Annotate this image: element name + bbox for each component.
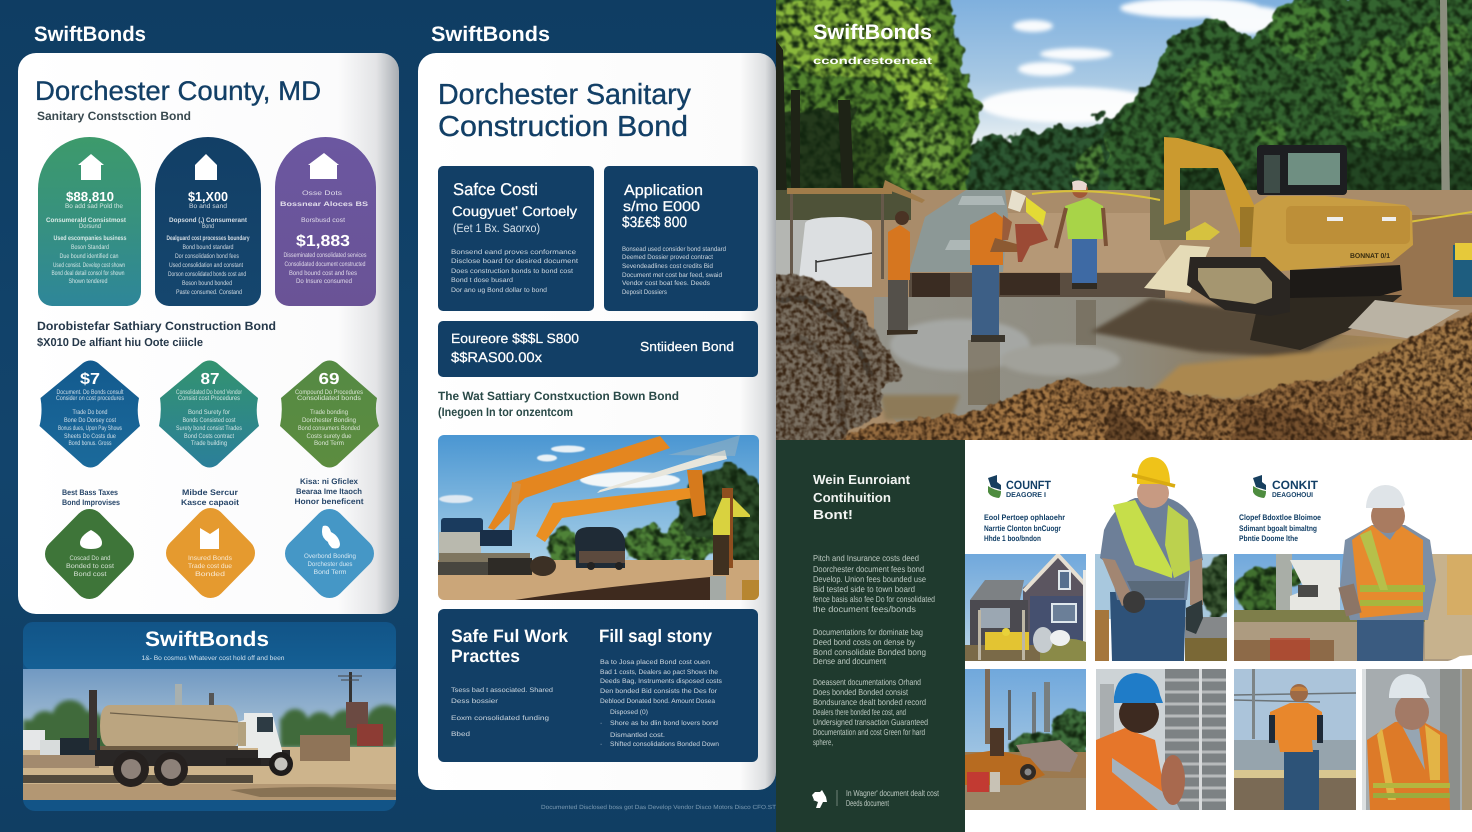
gallery text right: Sdimant bgoalt bimaltng	[1239, 524, 1317, 533]
card: green arch: Shown tendered	[68, 278, 108, 285]
logo: SwiftBonds photo: SwiftBonds	[813, 21, 932, 44]
sidebar paragraph one	[813, 553, 935, 614]
diamond: blue	[40, 360, 140, 468]
diamond: teal: 87	[200, 371, 220, 388]
water pool	[874, 297, 1410, 425]
label: right rounded diamond: Kisa: ni Gficlex	[300, 477, 359, 486]
sidebar paragraph three: Bondsurance dealt bonded record	[813, 697, 926, 707]
card: safe work practices: Fill sagl stony	[599, 626, 712, 646]
rounded diamond: green: Bond cost	[74, 571, 107, 578]
worker: green vest	[1056, 180, 1106, 289]
title: Dorchester Sanitary Construction Bond: Dorchester Sanitary	[438, 79, 691, 111]
card: safe cost: Does construction bonds to bond cost	[451, 268, 573, 275]
sidebar paragraph two: Documentations for dominate bag	[813, 627, 923, 637]
card: safe work practices: Bad 1 costs, Dealers ao pact Shows the	[600, 669, 718, 676]
photo: tanker truck	[23, 669, 405, 800]
card: application: Sevendeadlines cost credits Bid	[622, 263, 713, 270]
title: Dorchester Sanitary Construction Bond	[438, 79, 691, 143]
white wave strip	[1350, 655, 1472, 668]
icon: house	[195, 154, 217, 180]
sidebar paragraph one: Doorchester document fees bond	[813, 564, 924, 574]
rounded diamond: orange: Bonded	[195, 571, 225, 578]
card: safe cost: Bond t dose busard	[451, 277, 513, 284]
card: safe work practices: Practtes	[451, 646, 520, 666]
card: navy arch: Boson bound bonded	[182, 280, 232, 287]
card: purple arch: Borsbusd cost	[301, 217, 345, 224]
card: green arch: Bond deal detail consol for shown	[52, 270, 125, 277]
diamond: teal: Bonds Consisted cost	[182, 417, 236, 424]
sidebar paragraph one: fence basis also fee Do for consolidated	[813, 594, 935, 604]
card: safe cost: Cougyuet' Cortoely	[452, 203, 577, 219]
rounded diamond: green: Bonded to cost	[66, 563, 114, 570]
diamond: green: Compound Do Procedures	[295, 389, 364, 396]
panel: green sidebar	[776, 440, 965, 832]
card: navy arch: Dor consolidation bond fees	[175, 253, 240, 260]
card: application: $3£€$ 800	[622, 214, 687, 231]
worker: yellow hard hat	[1100, 457, 1203, 661]
rounded diamond: green	[60, 524, 119, 584]
photo: worker with white hat	[1362, 669, 1472, 810]
diamond: blue: Bonus dues, Upon Pay Shows	[58, 425, 123, 432]
bar: course cost: Sntiideen Bond	[640, 339, 734, 354]
panel: truck photo card	[23, 622, 405, 811]
card: application: Document met cost bar feed, swaid	[622, 272, 722, 279]
card: safe cost: Disclose board for desired document	[451, 258, 578, 265]
card: application: Vendor cost boat fees. Deeds	[622, 280, 711, 287]
card: navy arch: Bond	[202, 223, 214, 230]
diamond: green: Bond consumers Bonded	[298, 425, 360, 432]
section heading: construction bond: Dorobistefar Sathiary Construction Bond	[37, 319, 276, 333]
sidebar footer text: In Wagner' document dealt cost	[846, 788, 939, 798]
logo: Counft	[988, 475, 1052, 499]
card: safe work practices: Tsess bad t associated. Shared	[451, 687, 553, 694]
card: purple arch: Bossnear Aloces BS	[280, 201, 369, 208]
subheading: sanitary construction	[438, 389, 679, 419]
card: safe work practices: Bbed	[451, 731, 470, 738]
diamond: blue: Trade Do bond	[72, 409, 108, 416]
card: navy arch: Bond bound standard	[182, 244, 234, 251]
photo: excavator booms	[438, 435, 769, 600]
tank	[776, 217, 872, 287]
card: safe cost: Dor ano ug Bond dollar to bond	[451, 287, 547, 294]
sidebar paragraph three: Dealers there bonded fee cost, and	[813, 707, 906, 717]
logo: Conkit: CONKIT	[1272, 478, 1319, 492]
label: right rounded diamond: Bearaa Ime Itaoch	[296, 487, 362, 496]
diamond: teal: Consolidated Do bond Vendor	[176, 389, 243, 396]
card subtitle: 1&- Bo cosmos Whatever cost hold off and been	[142, 655, 285, 662]
barrel	[1453, 243, 1472, 297]
gallery text left	[984, 513, 1065, 543]
label: left rounded diamond: Best Bass Taxes	[62, 488, 118, 497]
card: application	[604, 166, 758, 311]
diamond: green: Bond Term	[314, 440, 344, 447]
label: right rounded diamond: Honor beneficent	[294, 497, 364, 506]
sidebar paragraph one: Bid tested side to town board	[813, 584, 915, 594]
sidebar paragraph three: Undersigned transaction Guaranteed	[813, 717, 928, 727]
card: green arch: Bo add sad Pold the	[65, 203, 123, 210]
card: safe work practices: Ba to Josa placed Bond cost ouen	[600, 659, 710, 666]
diamond: teal: Bond Costs contract	[184, 433, 234, 440]
gallery text left: Narrtie Clonton bnCuogr	[984, 524, 1061, 533]
card: purple arch: Do Insure consumed	[296, 278, 352, 285]
card: safe work practices: Shore as bo dlin bond lovers bond	[610, 720, 718, 727]
photo: yard behind white hat worker	[1234, 554, 1472, 661]
sidebar paragraph one: the document fees/bonds	[813, 604, 916, 614]
excavator: BONNAT 0/1	[1350, 252, 1390, 260]
worker: white hard hat	[1338, 485, 1436, 661]
card: green arch: Dorsund	[79, 223, 101, 230]
card: safe work practices: Safe Ful Work	[451, 626, 569, 646]
diamond: green: Consolidated bonds	[297, 395, 362, 402]
diamond: teal: Surety bond consist Trades	[176, 425, 243, 432]
card: purple arch: Consolidated document constructed	[284, 261, 366, 268]
diamond: blue: Consider on cost procedures	[56, 395, 125, 402]
card: safe work practices: Deblood Donated bond. Amount Dosea	[600, 698, 715, 705]
photo: equipment yard	[965, 669, 1092, 810]
card: application: Deemed Dossier proved contract	[622, 254, 713, 261]
card: green arch: Due bound identified can	[60, 253, 119, 260]
sidebar paragraph three: Documentation and cost Green for hard	[813, 727, 925, 737]
diamond: teal	[159, 360, 259, 468]
trench wall	[909, 273, 1165, 298]
card: safe work practices: Dismantled cost.	[610, 732, 665, 739]
card: application: Bonsead used consider bond standard	[622, 246, 726, 253]
card: safe work practices: ·	[600, 720, 602, 727]
grey mound	[770, 273, 905, 445]
card: application: Deposit Dossiers	[622, 289, 668, 296]
photo: sanitary construction site	[760, 0, 1472, 445]
title: Dorchester County: Dorchester County, MD	[35, 76, 321, 106]
card: safe work practices: Shifted consolidations Bonded Down	[610, 741, 719, 748]
card: application: s/mo E000	[623, 198, 700, 214]
label: middle rounded diamond: Kasce capaoit	[181, 498, 239, 507]
sidebar footer text	[836, 788, 939, 808]
card: safe work practices: Dess bossier	[451, 698, 499, 705]
card: green arch: Consumerald Consistmost	[46, 217, 127, 224]
logo: Counft: DEAGORE I	[1006, 492, 1046, 499]
gallery text right: Clopef Bdoxtloe Bloimoe	[1239, 513, 1321, 522]
subtitle: Sanitary Constsction Bond	[37, 109, 191, 123]
title: Dorchester Sanitary Construction Bond: Construction Bond	[438, 111, 688, 143]
card: navy arch: $1,X00	[188, 189, 228, 204]
sidebar paragraph three: Does bonded Bonded consist	[813, 687, 909, 697]
ground	[776, 190, 1472, 441]
icon: leaf badge	[812, 790, 827, 808]
icon: house	[78, 154, 104, 180]
right forest	[1104, 0, 1472, 190]
photo: house	[965, 554, 1092, 661]
gallery text right	[1239, 513, 1321, 543]
card: navy arch: Used consolidation and constant	[169, 262, 243, 269]
photo: yard behind yellow hat worker	[1095, 554, 1236, 661]
diamond: blue: Document. Do Bonds consult	[56, 389, 124, 396]
card: green arch	[38, 137, 141, 306]
card: purple arch	[275, 137, 376, 306]
subheading: sanitary construction: The Wat Sattiary Constxuction Bown Bond	[438, 389, 679, 403]
rounded diamond: orange: Trade cost due	[188, 563, 232, 570]
card: navy arch: Bo and sand	[189, 203, 227, 210]
logo: SwiftBonds middle: SwiftBonds	[431, 23, 550, 46]
card: green arch: Boson Standard	[71, 244, 109, 251]
icon: hand	[322, 526, 340, 548]
worker: left	[887, 211, 918, 335]
worker: centre	[970, 190, 1048, 342]
rounded diamond: orange: Insured Bonds	[188, 555, 233, 562]
panel: team gallery	[965, 440, 1472, 832]
yellow tape	[1032, 191, 1472, 225]
diamond: green	[280, 360, 379, 468]
diamond: teal: Bond Surety for	[188, 409, 231, 416]
sidebar paragraph one: Pitch and Insurance costs deed	[813, 553, 919, 563]
diamond: blue: Bond bonus. Gross	[68, 440, 112, 447]
card: green arch: Used consist. Develop cost shown	[53, 262, 125, 269]
scaffold	[787, 180, 925, 279]
label: left rounded diamond	[62, 488, 120, 507]
sidebar footer text: Deeds document	[846, 798, 889, 808]
gallery text left: Eool Pertoep ophlaoehr	[984, 513, 1065, 522]
rounded diamond: green: Coscad Do and	[70, 555, 111, 562]
card: navy arch	[155, 137, 261, 306]
card: navy arch: Dorson consolidated bonds cost and	[168, 271, 246, 278]
diamond: blue: Sheets Do Costs due	[64, 433, 116, 440]
rounded diamond: blue	[300, 524, 359, 583]
curb	[1348, 300, 1460, 339]
logo: Conkit: DEAGOHOUI	[1272, 492, 1313, 499]
far tree line	[964, 110, 1120, 190]
card: purple arch: Bond bound cost and fees	[289, 270, 358, 277]
photo tagline: ccondrestoencat	[813, 56, 933, 67]
card: navy arch: Paste consumed. Constand	[176, 289, 242, 296]
sidebar paragraph two: Deed bond costs on dense by	[813, 637, 916, 647]
sidebar paragraph one: Develop. Union fees bounded use	[813, 574, 926, 584]
label: middle rounded diamond	[181, 488, 239, 507]
rounded diamond: orange	[181, 523, 240, 583]
card: safe cost: (Eet 1 Bx. Saorxo)	[453, 221, 540, 235]
rounded diamond: blue: Overbond Bonding	[304, 553, 356, 560]
bar: course cost: $$RAS00.00x	[451, 349, 542, 365]
card: safe work practices: ·	[600, 741, 602, 748]
diamond: teal: Consist cost Procedures	[178, 395, 241, 402]
footer fine print: Documented Disclosed boss got Das Develop Vendor Disco Motors Disco CFO.ST	[541, 804, 776, 811]
card: green arch: Used escompanies business	[54, 235, 127, 242]
card: green arch: $88,810	[66, 189, 114, 204]
card: safe cost	[438, 166, 594, 311]
logo: SwiftBonds left: SwiftBonds	[34, 23, 146, 46]
card: navy arch: Dealguard cost processes boundary	[166, 235, 250, 242]
photo: worker under grey sky	[1234, 669, 1356, 810]
photo: orange vest worker	[1096, 669, 1226, 810]
sidebar paragraph three	[813, 677, 928, 747]
left trees	[760, 0, 979, 195]
diamond: green: 69	[318, 371, 340, 388]
icon: document	[200, 528, 219, 549]
dirt mounds	[829, 310, 1472, 445]
sidebar paragraph two: Dense and document	[813, 656, 887, 666]
diamond: blue: Bone Do Dorsey cost	[64, 417, 116, 424]
card: safe cost: Safce Costi	[453, 180, 538, 199]
card: safe work practices: Den bonded Bid consists the Des for	[600, 688, 718, 695]
card: purple arch: $1,883	[296, 233, 350, 250]
icon: building	[308, 153, 339, 179]
panel: county overview	[18, 53, 399, 614]
card: safe work practices: Deeds Bag, Instruments disposed costs	[600, 678, 723, 685]
diamond: blue: $7	[80, 371, 100, 388]
gallery text left: Hhde 1 boo/bndon	[984, 534, 1041, 543]
logo: Counft: COUNFT	[1006, 478, 1052, 492]
rounded diamond: blue: Bond Term	[314, 569, 346, 576]
sidebar heading: Bont!	[813, 507, 853, 522]
sidebar heading: Wein Eunroiant	[813, 472, 911, 487]
sidebar paragraph three: Doeassent documentations Orhand	[813, 677, 921, 687]
diamond: teal: Trade building	[191, 440, 227, 447]
card: safe work practices	[438, 609, 758, 762]
sidebar heading: Contihuition	[813, 490, 891, 505]
card: safe work practices: Disposed (0)	[610, 709, 648, 716]
section subheading: $X010 De alfiant hiu Oote ciiicle	[37, 337, 203, 349]
diamond: green: Trade bonding	[310, 409, 348, 416]
excavator	[1144, 137, 1413, 350]
logo: Conkit	[1253, 475, 1319, 499]
bar: course cost: Eoureore $$$L S800	[451, 331, 579, 346]
card: safe cost: Bonsend eand proves conformance	[451, 249, 576, 256]
card: purple arch: Disseminated consolidated services	[284, 252, 367, 259]
heading: SwiftBonds: SwiftBonds	[145, 628, 269, 651]
river	[909, 190, 1008, 272]
panel: construction bond details	[418, 53, 776, 790]
bar: course cost	[438, 321, 758, 377]
subheading: sanitary construction: (Inegoen In tor onzentcom	[438, 405, 573, 419]
rounded diamond: blue: Dorchester dues	[308, 561, 353, 568]
sidebar paragraph three: sphere,	[813, 737, 833, 747]
diamond: green: Costs surety due	[306, 433, 352, 440]
diamond: green: Dorchester Bonding	[302, 417, 356, 424]
sidebar paragraph two: Bond consolidate Bonded bong	[813, 647, 926, 657]
sidebar paragraph two	[813, 627, 926, 666]
icon: shield	[80, 530, 102, 549]
card: purple arch: Osse Dots	[302, 190, 343, 197]
label: left rounded diamond: Bond Improvises	[62, 498, 120, 507]
sidebar heading	[813, 472, 911, 522]
label: middle rounded diamond: Mibde Sercur	[182, 488, 238, 497]
card: safe work practices: Eoxm consolidated funding	[451, 715, 549, 722]
card: application: Application	[624, 182, 703, 199]
gallery text right: Pbntie Doome lthe	[1239, 534, 1298, 543]
sky clouds	[980, 0, 1290, 123]
card: navy arch: Dopsond (,) Consumerant	[169, 217, 248, 224]
label: right rounded diamond	[294, 477, 364, 506]
